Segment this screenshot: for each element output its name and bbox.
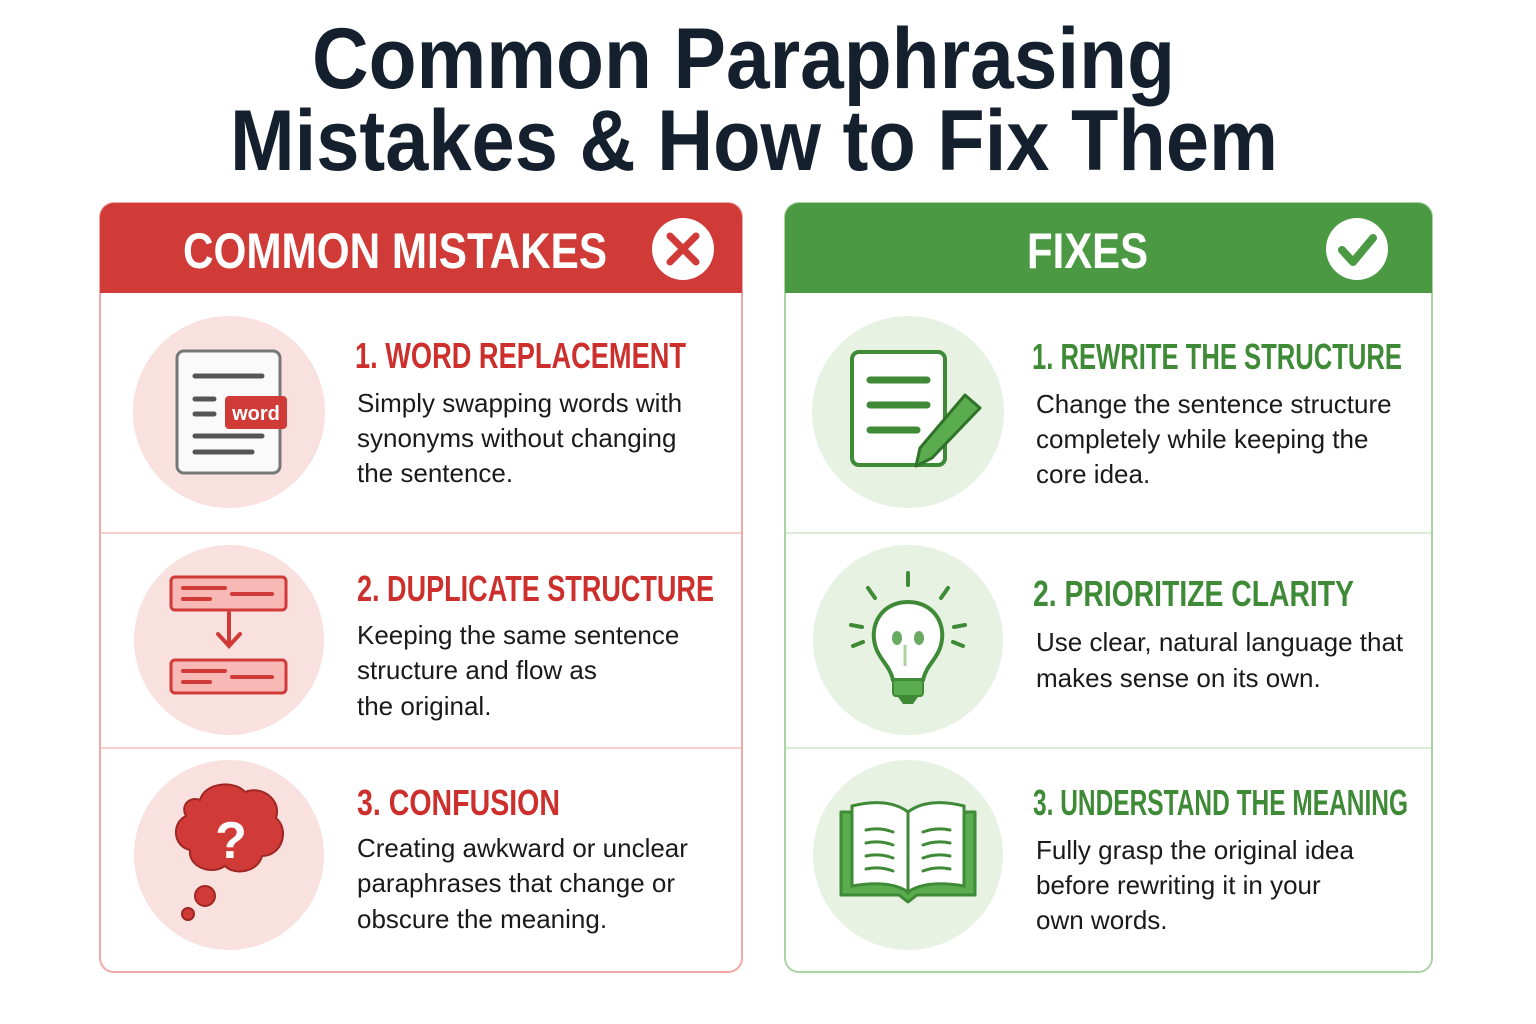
panel: common mistakes: [100, 203, 742, 972]
header: fixes: FIXES: [1027, 223, 1148, 279]
header: fixes: [785, 203, 1432, 293]
title: Mistakes & How to Fix Them: [230, 93, 1278, 189]
item: word replacement: synonyms without changing: [357, 423, 676, 453]
item: understand the meaning: [813, 760, 1408, 950]
item: understand the meaning: before rewriting it in your: [1036, 870, 1321, 900]
item: word replacement: word: [231, 403, 280, 425]
item: rewrite the structure: Change the sentence structure: [1036, 389, 1392, 419]
item: duplicate structure: structure and flow as: [357, 655, 597, 685]
item: prioritize clarity: [813, 545, 1404, 735]
item: duplicate structure: Keeping the same sentence: [357, 620, 679, 650]
item: word replacement: [133, 316, 686, 508]
item: understand the meaning: own words.: [1036, 905, 1168, 935]
item: word replacement: Simply swapping words with: [357, 388, 682, 418]
item: confusion: 3. CONFUSION: [357, 782, 560, 823]
panel: fixes: [785, 203, 1432, 972]
item: rewrite the structure: completely while keeping the: [1036, 424, 1368, 454]
item: word replacement: the sentence.: [357, 458, 513, 488]
item: prioritize clarity: Use clear, natural language that: [1036, 627, 1404, 657]
item: confusion: [134, 760, 688, 950]
item: duplicate structure: [134, 545, 714, 735]
item: duplicate structure: 2. DUPLICATE STRUCTURE: [357, 568, 714, 609]
item: understand the meaning: Fully grasp the original idea: [1036, 835, 1354, 865]
item: rewrite the structure: [812, 316, 1402, 508]
item: rewrite the structure: core idea.: [1036, 459, 1150, 489]
header: common mistakes: [100, 203, 742, 293]
title: Common Paraphrasing: [312, 11, 1175, 107]
header: common mistakes: COMMON MISTAKES: [183, 223, 607, 279]
item: duplicate structure: the original.: [357, 691, 491, 721]
item: prioritize clarity: 2. PRIORITIZE CLARITY: [1033, 573, 1354, 614]
item: prioritize clarity: makes sense on its own.: [1036, 663, 1321, 693]
item: confusion: paraphrases that change or: [357, 868, 675, 898]
item: confusion: ?: [215, 812, 247, 870]
item: confusion: obscure the meaning.: [357, 904, 607, 934]
item: confusion: Creating awkward or unclear: [357, 833, 688, 863]
title: [230, 11, 1278, 189]
item: word replacement: 1. WORD REPLACEMENT: [355, 335, 686, 376]
